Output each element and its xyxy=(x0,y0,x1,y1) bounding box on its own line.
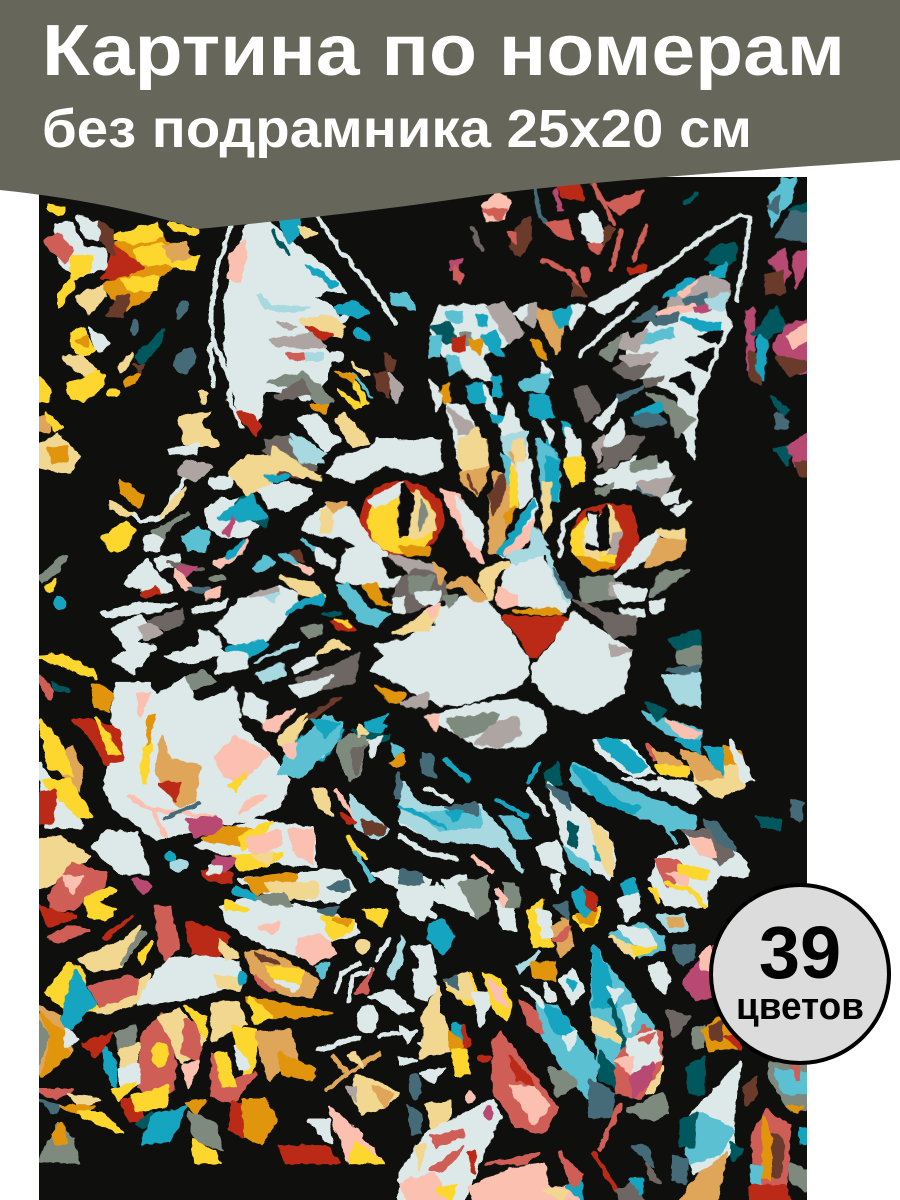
cat face: eyes, nose, muzzle, cheeks xyxy=(200,440,700,760)
badge: 39 colours: 39 xyxy=(759,911,841,994)
painting: cat among flowers xyxy=(39,177,807,1200)
badge: 39 colours: цветов xyxy=(736,986,864,1028)
title: Картина по номерам xyxy=(42,11,845,91)
chest fur, leaves and lower-right flowers xyxy=(400,740,807,1200)
top-left flower, left ear and left fur xyxy=(39,205,414,650)
right ear, top flowers and right-edge foliage xyxy=(430,180,807,500)
badge: 39 colours xyxy=(711,885,889,1063)
subtitle: без подрамника 25х20 см xyxy=(42,99,752,159)
header banner xyxy=(0,0,900,229)
large lower-left flower xyxy=(39,642,439,1163)
